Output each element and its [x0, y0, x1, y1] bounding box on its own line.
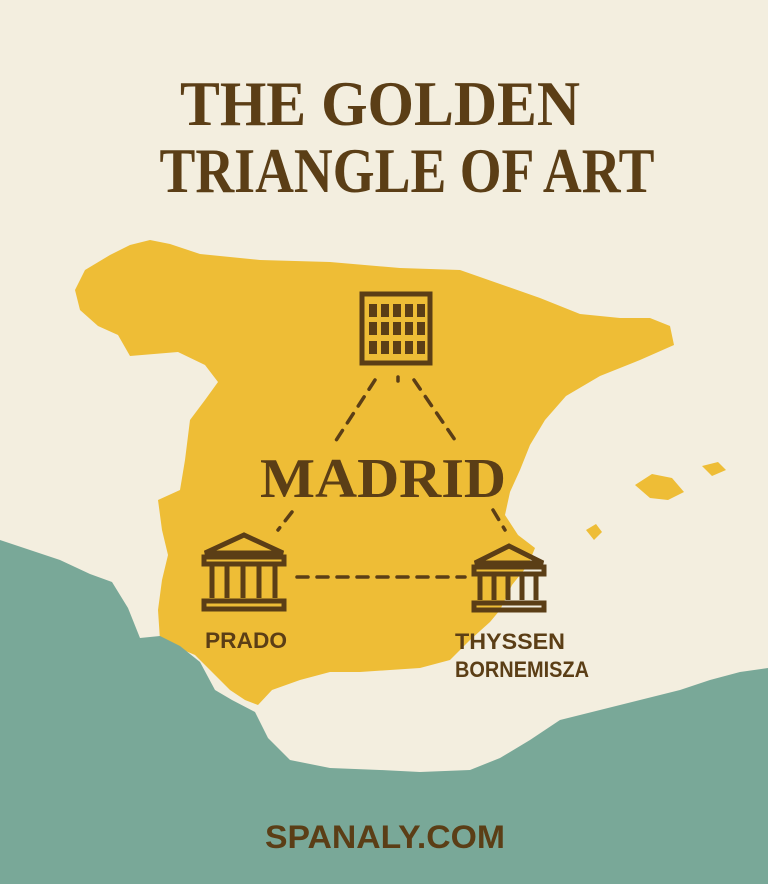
label: prado: PRADO — [205, 628, 287, 653]
map: spain — [75, 240, 726, 705]
title — [160, 68, 654, 206]
icon: thyssen temple — [474, 546, 544, 610]
dashed triangle lines — [278, 377, 505, 577]
icon: gallery grid — [362, 294, 430, 363]
map: sea — [0, 540, 768, 884]
label: thyssen bornemisza: THYSSEN — [455, 629, 565, 654]
icon: prado temple — [204, 535, 284, 609]
label: thyssen bornemisza: BORNEMISZA — [455, 657, 589, 682]
title: THE GOLDEN — [180, 68, 580, 139]
label: thyssen bornemisza — [455, 629, 589, 682]
footer: website: SPANALY.COM — [265, 819, 505, 855]
title: TRIANGLE OF ART — [160, 135, 654, 206]
label: madrid: MADRID — [260, 448, 506, 510]
